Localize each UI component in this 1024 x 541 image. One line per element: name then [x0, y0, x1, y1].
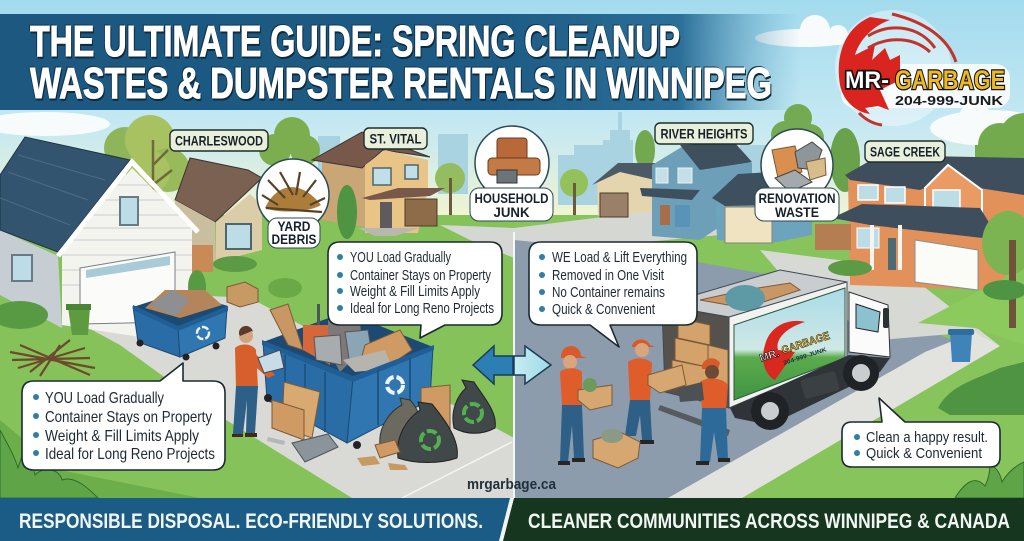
- city skyline: [318, 112, 770, 210]
- house: Charleswood: [175, 158, 262, 272]
- truck side panel with logo: GARBAGE: [780, 330, 831, 357]
- lawn patch with bin: [918, 288, 1024, 345]
- sky background: [0, 0, 1024, 215]
- callout: dumpster lower: [22, 363, 225, 470]
- callout: junk removal upper: No Container remains: [552, 285, 665, 301]
- garbage bags: [375, 380, 495, 462]
- logo: Mr. Garbage: [835, 10, 1010, 126]
- callout: dumpster upper: [328, 242, 502, 338]
- truck side panel with logo: MR.: [758, 347, 781, 365]
- callout: junk removal lower: [842, 398, 1000, 467]
- neighbourhood label: St. Vital: [364, 128, 427, 149]
- neighbourhood label: Sage Creek: SAGE CREEK: [870, 144, 940, 160]
- truck side panel with logo: [734, 288, 845, 400]
- darker lawn stripe: [0, 420, 200, 498]
- title: WASTES & DUMPSTER RENTALS IN WINNIPEG: [30, 59, 772, 108]
- arrow left: [473, 346, 513, 384]
- callout: junk removal upper: Quick & Convenient: [552, 302, 655, 318]
- right sidewalk: [668, 332, 1000, 498]
- label: renovation waste: [755, 188, 839, 221]
- small cardboard box: [227, 282, 258, 307]
- worker 2 carrying box: [625, 339, 686, 444]
- label: renovation waste: WASTE: [775, 204, 819, 220]
- label: household junk: JUNK: [494, 204, 530, 220]
- left sidewalk line: [402, 442, 512, 498]
- stacked cargo boxes: [672, 318, 728, 392]
- callout: junk removal lower: Quick & Convenient: [866, 445, 983, 462]
- right driveway to house: [760, 250, 1000, 346]
- callout: junk removal upper: [529, 242, 697, 347]
- callout: junk removal lower: Clean a happy result.: [866, 429, 988, 446]
- house: large white foreground: [0, 137, 206, 345]
- blue wheelie bin: [948, 329, 974, 362]
- small shrub: [268, 278, 302, 298]
- label: yard debris: YARD: [278, 218, 310, 234]
- distant driveway: [440, 205, 720, 258]
- background trees: [104, 104, 1024, 218]
- truck side panel with logo: 204-999-JUNK: [783, 347, 828, 367]
- arrow right: [514, 346, 551, 384]
- callout: dumpster lower: Ideal for Long Reno Projects: [45, 446, 215, 463]
- neighbourhood label: St. Vital: ST. VITAL: [370, 130, 422, 146]
- corner foliage: left: [0, 430, 98, 498]
- label: renovation waste: RENOVATION: [758, 190, 836, 206]
- callout: dumpster upper: Weight & Fill Limits Apply: [350, 284, 481, 300]
- footer bar: left: [0, 498, 512, 541]
- neighbourhood label: Charleswood: [170, 130, 268, 151]
- house: River Heights: [592, 143, 812, 243]
- house: St. Vital: [312, 132, 445, 239]
- logo maple leaf and swoosh: [839, 17, 900, 114]
- icon: renovation waste: [755, 129, 839, 221]
- hedge, lower right: [938, 362, 1024, 415]
- label: household junk: [470, 188, 553, 221]
- icon: household junk: [470, 126, 553, 221]
- loose scraps: [267, 437, 408, 470]
- worker 1 holding box: [558, 346, 612, 465]
- title: [30, 17, 772, 108]
- footer bar: right: [499, 498, 1024, 541]
- large blue dumpster with junk: [262, 304, 434, 449]
- callout: dumpster lower: Container Stays on Property: [45, 409, 212, 426]
- divider line: [513, 232, 515, 498]
- neighbourhood label: Charleswood: CHARLESWOOD: [175, 132, 263, 148]
- small blue dumpster: [133, 290, 228, 360]
- label: household junk: HOUSEHOLD: [474, 190, 548, 206]
- title banner: [0, 14, 800, 110]
- callout: dumpster upper: Ideal for Long Reno Projects: [350, 301, 494, 317]
- box truck: [658, 270, 890, 436]
- tree, right foreground: [982, 211, 1024, 328]
- logo: Mr. Garbage: MR-: [845, 67, 889, 94]
- neighbourhood label: River Heights: [655, 123, 753, 144]
- callout: dumpster lower: YOU Load Gradually: [45, 390, 164, 407]
- website: mrgarbage.ca: [467, 477, 557, 493]
- footer bar: left: RESPONSIBLE DISPOSAL. ECO-FRIENDLY SOLUTIONS.: [19, 510, 483, 533]
- left driveway: [70, 295, 514, 498]
- green wheelie bin: [66, 304, 91, 335]
- worker 3 from behind: [678, 358, 730, 465]
- callout: junk removal upper: WE Load & Lift Everything: [552, 250, 687, 266]
- corner foliage: right: [955, 462, 1024, 498]
- right road: [514, 240, 965, 498]
- right ground: grass: [514, 215, 1024, 498]
- house: Sage Creek: [815, 155, 1024, 290]
- left ground: grass: [0, 215, 514, 498]
- neighbourhood label: Sage Creek: [865, 141, 945, 162]
- double arrow: [473, 346, 551, 384]
- neighbourhood label: River Heights: RIVER HEIGHTS: [660, 126, 748, 142]
- recycling symbol on dumpster: [387, 377, 403, 393]
- callout: junk removal upper: Removed in One Visit: [552, 268, 664, 284]
- icon: yard debris: [257, 159, 329, 248]
- boards and box beside dumpster: [272, 382, 338, 462]
- twig pile: [10, 340, 95, 376]
- callout: dumpster upper: Container Stays on Property: [350, 268, 492, 284]
- label: yard debris: [268, 218, 320, 248]
- clouds: [0, 15, 1024, 146]
- callout: dumpster lower: Weight & Fill Limits Apply: [45, 428, 199, 445]
- truck wheels: [751, 355, 879, 430]
- callout: dumpster upper: YOU Load Gradually: [350, 250, 452, 266]
- person with clipboard: [232, 326, 284, 437]
- logo: Mr. Garbage: 204-999-JUNK: [895, 93, 1004, 108]
- box on road: [593, 429, 640, 468]
- title: THE ULTIMATE GUIDE: SPRING CLEANUP: [30, 17, 680, 66]
- label: yard debris: DEBRIS: [272, 231, 316, 247]
